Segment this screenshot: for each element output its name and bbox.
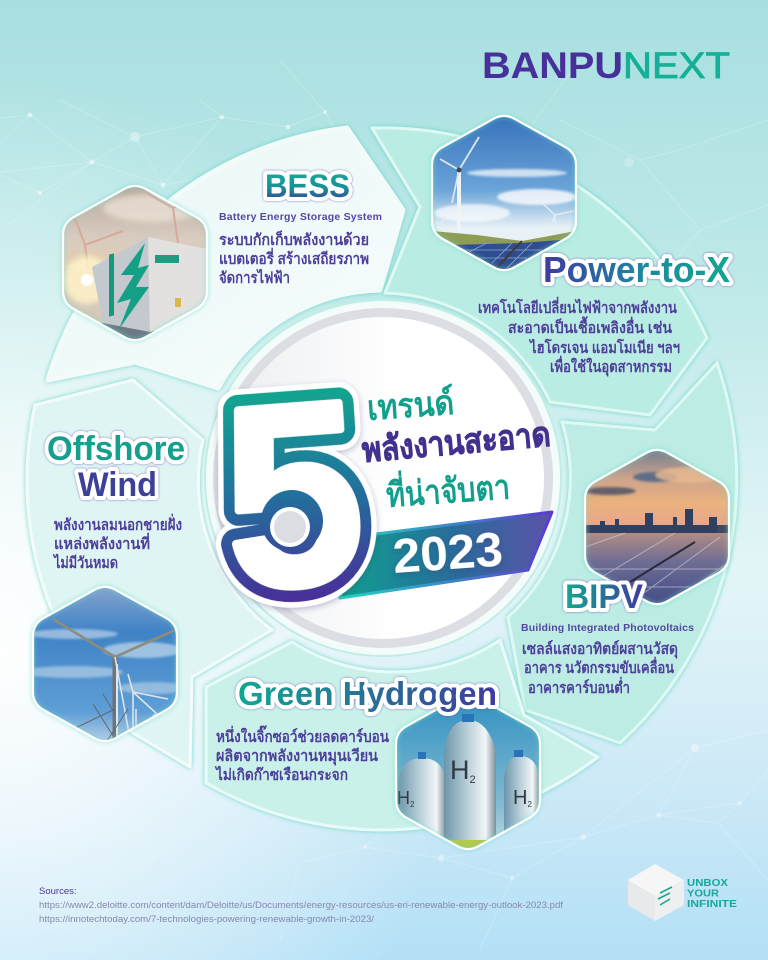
tagline: Unbox Your Infinite: YOUR <box>687 888 719 900</box>
text block: ผลิตจากพลังงานหมุนเวียน <box>216 747 378 766</box>
text block: ระบบกักเก็บพลังงานด้วย <box>219 229 369 249</box>
logo: Banpu Next: BANPU <box>482 45 623 86</box>
text block: เซลล์แสงอาทิตย์ผสานวัสดุ <box>522 640 678 659</box>
icon: hydrogen tanks hexagon photo: H <box>450 755 470 785</box>
icon: solar rooftop hexagon photo <box>584 447 729 607</box>
banner: 2023 <box>340 512 552 598</box>
banner: 2023: 2023 <box>391 523 504 584</box>
sources: Sources: <box>39 886 76 897</box>
text block: ไฮโดรเจน แอมโมเนีย ฯลฯ <box>528 338 680 357</box>
text block: จัดการไฟฟ้า <box>219 268 290 287</box>
text block <box>52 513 182 572</box>
big number 5: 5 <box>216 347 371 644</box>
panel: Power-to-X <box>372 113 730 415</box>
tagline: Unbox Your Infinite: UNBOX <box>687 877 728 889</box>
panel: BIPV <box>508 363 737 743</box>
text block <box>478 296 680 377</box>
panel: Green Hydrogen <box>206 640 598 852</box>
heading: BESS: BESS <box>265 168 350 204</box>
icon: hydrogen tanks hexagon photo: H <box>513 787 527 809</box>
text block: อาคารคาร์บอนต่ำ <box>528 676 630 697</box>
icon: hydrogen tanks hexagon photo: 2 <box>527 800 532 809</box>
panel: Offshore Wind <box>23 380 272 767</box>
icon: hydrogen tanks hexagon photo: 2 <box>470 774 476 786</box>
sources: https://innotechtoday.com/7-technologies-powering-renewable-growth-in-2023/ <box>39 914 375 924</box>
icon: battery storage hexagon photo <box>63 183 207 343</box>
sources <box>39 886 564 924</box>
icon: hydrogen tanks hexagon photo: H <box>397 788 410 808</box>
text block <box>219 229 369 287</box>
icon: wind and solar hexagon photo <box>432 113 577 273</box>
icon: offshore wind hexagon photo <box>23 584 188 744</box>
big number 5: 5 <box>216 347 371 644</box>
logo: Banpu Next <box>482 45 730 86</box>
center heading: ที่น่าจับตา <box>384 462 511 515</box>
text block: พลังงานลมนอกชายฝั่ง <box>54 513 182 534</box>
text block: เพื่อใช้ในอุตสาหกรรม <box>550 355 672 377</box>
heading: Offshore Wind <box>47 430 185 504</box>
heading: Power-to-X: Power-to-X <box>543 249 730 290</box>
tagline: Unbox Your Infinite <box>687 877 737 910</box>
sources: https://www2.deloitte.com/content/dam/Deloitte/us/Documents/energy-resources/us-eri-renewable-energy-outlook-2023.pdf <box>39 900 564 910</box>
text block <box>214 725 389 784</box>
text block: ไม่เกิดก๊าซเรือนกระจก <box>214 765 348 784</box>
heading: Offshore Wind: Offshore <box>47 430 185 468</box>
text block: เทคโนโลยีเปลี่ยนไฟฟ้าจากพลังงาน <box>478 296 677 317</box>
icon: hydrogen tanks hexagon photo <box>396 692 540 852</box>
center heading: พลังงานสะอาด <box>360 416 552 470</box>
text block: แหล่งพลังงานที่ <box>54 532 150 553</box>
icon: hydrogen tanks hexagon photo: 2 <box>410 800 415 809</box>
text block: ไม่มีวันหมด <box>52 553 118 572</box>
big number 5: 5 <box>216 347 371 644</box>
subheading: Building Integrated Photovoltaics <box>521 622 694 634</box>
text block: อาคาร นวัตกรรมขับเคลื่อน <box>524 656 674 677</box>
logo: Banpu Next: NEXT <box>623 45 730 86</box>
subheading: Battery Energy Storage System <box>219 211 382 223</box>
ring in number 5 <box>261 490 323 552</box>
heading: Green Hydrogen: Green Hydrogen <box>238 675 497 712</box>
center heading: เทรนด์ <box>366 383 455 428</box>
panel: BESS <box>48 128 403 388</box>
center heading <box>360 383 552 515</box>
text block: สะอาดเป็นเชื้อเพลิงอื่น เช่น <box>508 316 672 337</box>
icon: unbox cube <box>628 864 684 921</box>
text block <box>522 640 678 697</box>
center disk <box>205 300 561 656</box>
heading: Offshore Wind: Wind <box>78 466 157 504</box>
text block: หนึ่งในจิ๊กซอว์ช่วยลดคาร์บอน <box>216 725 389 746</box>
heading: BIPV: BIPV <box>565 578 643 616</box>
tagline: Unbox Your Infinite: INFINITE <box>687 898 737 910</box>
text block: แบตเตอรี่ สร้างเสถียรภาพ <box>219 247 369 268</box>
